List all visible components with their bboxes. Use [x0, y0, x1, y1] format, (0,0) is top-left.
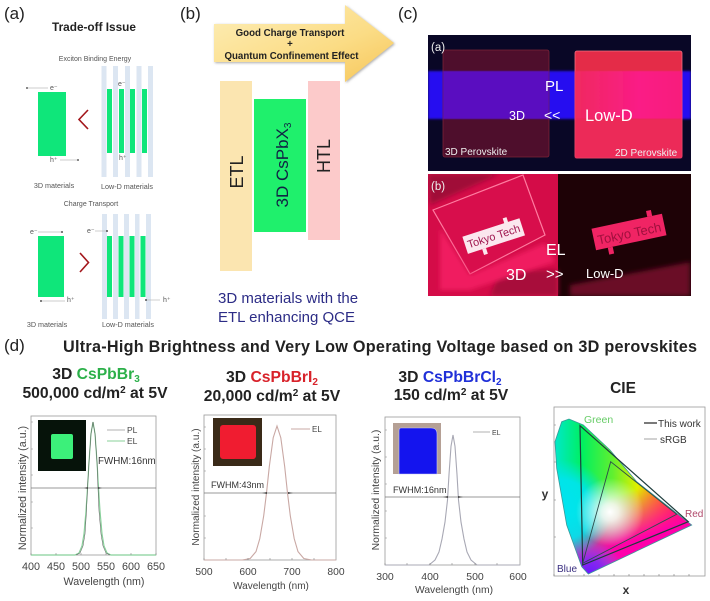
chart: blue EL spectrum: Wavelength (nm)	[415, 585, 493, 596]
inset: blue emission	[393, 423, 441, 474]
arrow: good charge transport plus quantum confinement: +	[287, 39, 293, 50]
photo: EL comparison: Tokyo Tech	[596, 219, 663, 248]
label: low-D materials: Low-D materials	[102, 320, 154, 329]
panel label (b): (b)	[180, 4, 201, 23]
panel label (a): (a)	[4, 4, 25, 23]
chart: blue EL spectrum: FWHM:16nm	[393, 485, 447, 495]
diagram: 3D material charge transport	[30, 229, 75, 304]
chart: red EL spectrum: 500	[195, 567, 213, 578]
layer: 3D CsPbX3: 3	[283, 122, 294, 128]
arrow: good charge transport plus quantum confinement: Quantum Confinement Effect	[224, 51, 359, 62]
chart: red EL spectrum: Normalized intensity (a.u.)	[191, 428, 202, 546]
layer: HTL	[308, 81, 340, 240]
layer: 3D CsPbX3: 3D CsPbX	[273, 128, 292, 207]
heading: 500,000 cd/m2 at 5V: 2	[120, 385, 126, 396]
photo: EL comparison: >>	[546, 266, 564, 283]
chart: red EL spectrum: 800	[327, 567, 345, 578]
panel: CIE diagram	[542, 380, 705, 597]
photo: PL comparison: 3D	[509, 109, 525, 123]
heading: CsPbBrI2: 3D CsPbBrI	[226, 369, 312, 386]
chart: CIE gamut: Green	[584, 414, 613, 426]
panel label (c): (c)	[398, 4, 418, 23]
panel: (c) photographs	[398, 4, 691, 296]
chart: green EL spectrum: 450	[47, 561, 65, 573]
heading: CsPbBr3: 3D CsPbBr	[52, 366, 134, 383]
heading: 150 cd/m2 at 5V: 150 cd/m	[394, 387, 461, 404]
diagram: 3D material binding energy: h⁺	[50, 157, 58, 164]
layer: ETL	[220, 81, 252, 271]
heading: charge transport: Charge Transport	[64, 201, 118, 208]
chart: green EL spectrum: 600	[122, 561, 140, 573]
photo: PL comparison: 2D Perovskite	[615, 148, 678, 159]
heading: 20,000 cd/m2 at 5V: 20,000 cd/m	[204, 388, 293, 405]
diagram: 3D material charge transport: e⁻	[30, 229, 38, 236]
diagram: low-D material binding energy: h⁺	[119, 155, 127, 162]
photo: EL comparison: EL	[546, 242, 566, 259]
photo: PL comparison	[428, 35, 691, 171]
chart: blue EL spectrum: EL	[492, 430, 501, 437]
diagram: low-D material binding energy	[102, 66, 153, 177]
icon: greater-than symbol	[80, 253, 88, 272]
chart: green EL spectrum	[17, 416, 165, 588]
chart: green EL spectrum: FWHM:16nm	[98, 456, 156, 467]
photo: EL comparison: (b)	[431, 181, 445, 193]
chart: CIE gamut	[542, 407, 705, 597]
layer: HTL: HTL	[314, 139, 334, 173]
heading: exciton binding energy: Exciton Binding Energy	[59, 56, 132, 63]
photo: EL comparison: Low-D	[586, 266, 624, 281]
photo: EL comparison: 3D	[506, 267, 526, 284]
photo: EL comparison: Tokyo Tech	[466, 223, 522, 251]
heading: CsPbBr3: 3	[134, 374, 140, 385]
label: low-D materials: Low-D materials	[101, 182, 153, 191]
panel: CsPbBrCl2 blue spectrum	[371, 369, 527, 596]
diagram: 3D material charge transport: h⁺	[67, 297, 75, 304]
chart: blue EL spectrum	[371, 417, 527, 596]
label: 3D materials: 3D materials	[27, 320, 68, 329]
chart: green EL spectrum: 400	[22, 561, 40, 573]
chart: red EL spectrum: EL	[312, 425, 322, 434]
heading: 20,000 cd/m2 at 5V: 2	[293, 388, 299, 399]
layer: ETL: ETL	[227, 155, 247, 189]
photo: PL comparison: PL	[545, 78, 563, 95]
heading: ultra-high brightness: Ultra-High Brightness and Very Low Operating Voltage based on 3D perovskites	[63, 338, 697, 356]
panel: (a) trade-off issue	[4, 4, 171, 329]
photo: EL comparison	[428, 174, 691, 296]
chart: green EL spectrum: 500	[72, 561, 90, 573]
heading: CsPbBrI2: 2	[312, 377, 318, 388]
chart: CIE gamut: x	[623, 583, 630, 597]
layer: 3D CsPbX3	[254, 99, 306, 232]
caption: 3D materials with the ETL enhancing QCE: ETL enhancing QCE	[218, 309, 355, 326]
chart: blue EL spectrum: 300	[376, 571, 394, 583]
photo: PL comparison: (a)	[431, 42, 445, 54]
heading: 500,000 cd/m2 at 5V: at 5V	[126, 385, 168, 402]
inset: red emission	[213, 418, 262, 466]
chart: blue EL spectrum: 600	[509, 571, 527, 583]
panel: CsPbBrI2 red spectrum	[191, 369, 345, 592]
chart: green EL spectrum: PL	[127, 425, 138, 435]
chart: green EL spectrum: Wavelength (nm)	[64, 576, 144, 588]
heading: CsPbBrCl2: 2	[496, 377, 502, 388]
heading: 150 cd/m2 at 5V: 2	[461, 387, 467, 398]
heading: trade-off issue: Trade-off Issue	[52, 20, 136, 34]
heading: CsPbBrCl2: 3D CsPbBrCl	[398, 369, 496, 386]
chart: blue EL spectrum: 500	[466, 571, 484, 583]
heading: 150 cd/m2 at 5V: at 5V	[466, 387, 509, 404]
heading: 20,000 cd/m2 at 5V: at 5V	[298, 388, 341, 405]
diagram: low-D material charge transport: h⁺	[163, 297, 171, 304]
diagram: low-D material binding energy: e⁻	[118, 81, 126, 88]
chart: blue EL spectrum: Normalized intensity (a.u.)	[371, 430, 382, 550]
diagram: 3D material binding energy	[26, 85, 79, 164]
chart: CIE gamut: Blue	[557, 564, 577, 575]
panel: (b) device structure	[180, 4, 394, 326]
arrow: good charge transport plus quantum confinement: Good Charge Transport	[236, 28, 345, 39]
heading: 500,000 cd/m2 at 5V: 500,000 cd/m	[22, 385, 120, 402]
chart: red EL spectrum: 700	[283, 567, 301, 578]
label: 3D materials: 3D materials	[34, 181, 75, 190]
chart: green EL spectrum: Normalized intensity (a.u.)	[17, 426, 29, 550]
chart: red EL spectrum: 600	[239, 567, 257, 578]
chart: red EL spectrum	[191, 415, 345, 592]
photo: PL comparison: Low-D	[585, 107, 633, 125]
diagram: low-D material charge transport: e⁻	[87, 228, 95, 235]
diagram: low-D material charge transport	[87, 214, 171, 319]
chart: red EL spectrum: FWHM:43nm	[211, 480, 264, 490]
arrow: good charge transport plus quantum confinement	[214, 5, 394, 82]
chart: red EL spectrum: Wavelength (nm)	[233, 581, 309, 592]
chart: CIE gamut: sRGB	[660, 435, 687, 446]
chart: green EL spectrum: 650	[147, 561, 165, 573]
panel label (d): (d)	[4, 336, 25, 355]
panel: CsPbBr3 green spectrum	[17, 366, 168, 588]
caption: 3D materials with the ETL enhancing QCE: 3D materials with the	[218, 290, 358, 307]
chart: CIE gamut: Red	[685, 509, 703, 520]
diagram: 3D material binding energy: e⁻	[50, 85, 58, 92]
chart: blue EL spectrum: 400	[421, 571, 439, 583]
heading: CIE: CIE	[610, 380, 636, 397]
photo: PL comparison: 3D Perovskite	[445, 147, 508, 158]
chart: CIE gamut: y	[542, 487, 549, 501]
chart: green EL spectrum: EL	[127, 436, 138, 446]
chart: green EL spectrum: 550	[97, 561, 115, 573]
inset: green emission	[38, 420, 86, 471]
icon: less-than symbol	[79, 110, 88, 129]
chart: CIE gamut: This work	[658, 419, 702, 430]
photo: PL comparison: <<	[544, 107, 560, 123]
